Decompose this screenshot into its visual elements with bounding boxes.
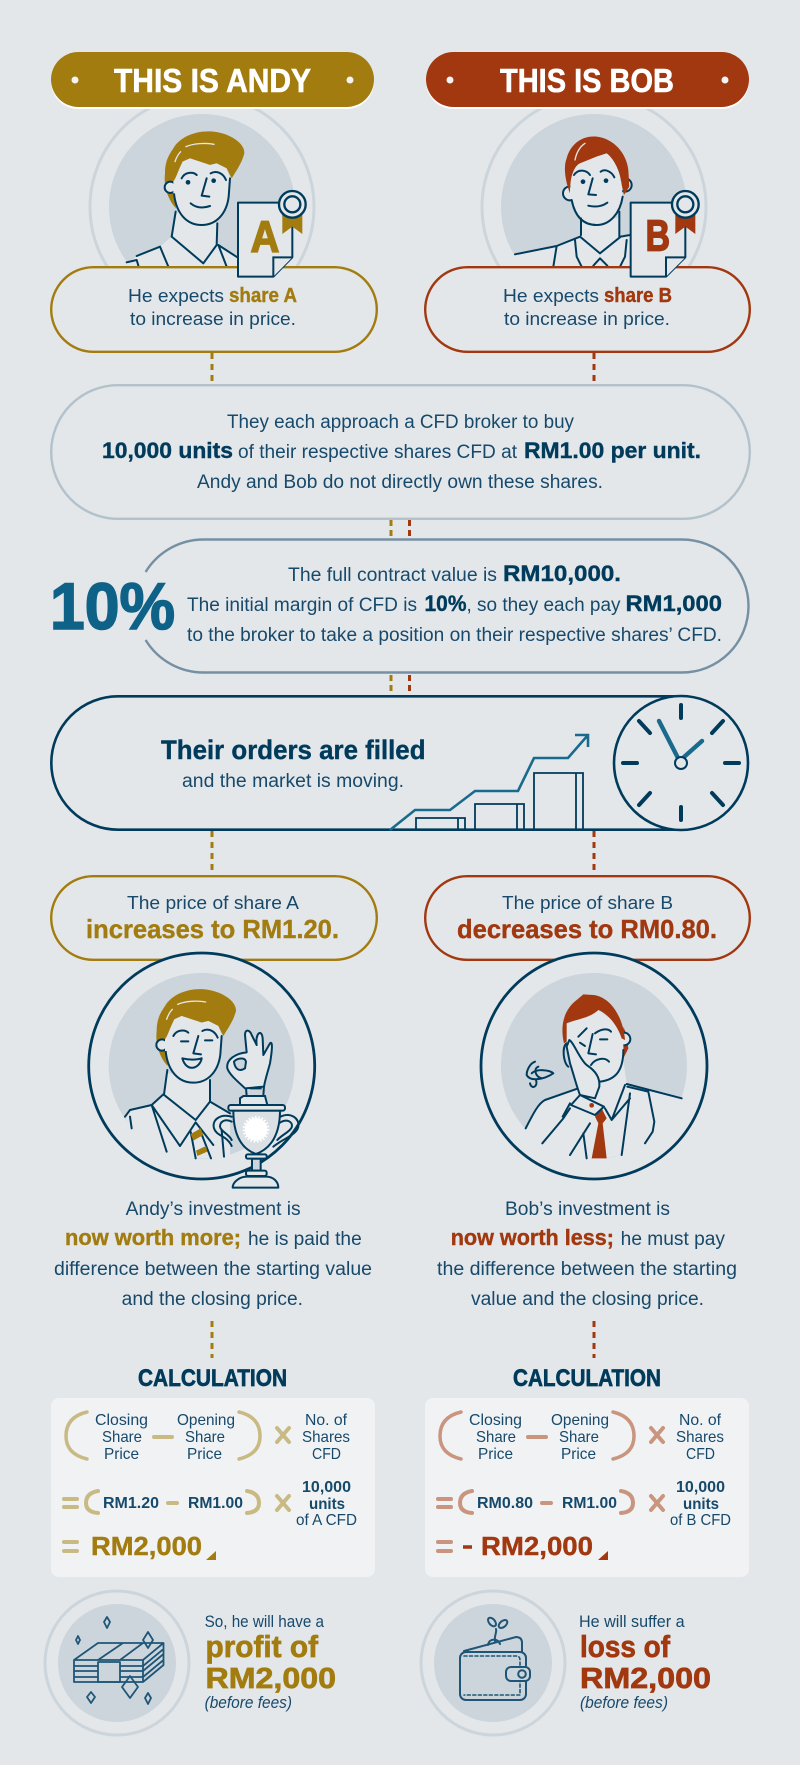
callout: share B price decreases: The price of share B (502, 892, 673, 913)
panel: Bob calculation: 10,000 (676, 1479, 725, 1496)
icon: certificate B: B (646, 212, 670, 261)
text block: Bob's investment: the difference between the starting (437, 1259, 737, 1280)
panel: Andy calculation: RM2,000 (91, 1531, 202, 1561)
panel: Andy calculation: RM1.20 (103, 1495, 159, 1512)
callout: share B price decreases: decreases to RM0.80. (457, 914, 717, 944)
text block: Andy profit: RM2,000 (206, 1663, 336, 1695)
text block: Bob's investment: now worth less; (451, 1225, 614, 1250)
text block: Bob's investment: value and the closing price. (471, 1289, 704, 1310)
text block: Bob loss: RM2,000 (580, 1663, 711, 1695)
panel: Andy calculation: of A CFD (296, 1512, 357, 1529)
panel: Bob calculation: RM0.80 (477, 1495, 533, 1512)
callout: Andy expects share A: to increase in price. (130, 308, 296, 329)
panel: orders are filled: Their orders are filled (161, 735, 426, 765)
panel: Andy calculation: CFD (312, 1446, 341, 1463)
callout: Andy expects share A: He expects (128, 285, 224, 306)
text block: Andy's investment: he is paid the (248, 1229, 362, 1250)
icon: OK hand and trophy (214, 1031, 299, 1188)
text block: Andy's investment: Andy’s investment is (126, 1199, 301, 1220)
callout: Bob expects share B: He expects (503, 285, 599, 306)
panel: Andy calculation: Opening (177, 1412, 235, 1429)
icon: certificate B (631, 191, 699, 277)
panel: Bob calculation: Share (559, 1429, 599, 1446)
panel: Andy calculation: Share (185, 1429, 225, 1446)
callout: share A price increases (51, 876, 377, 960)
text block: Bob's investment: Bob’s investment is (505, 1199, 670, 1220)
panel: approach a CFD broker: They each approach a CFD broker to buy (227, 412, 574, 433)
panel: initial margin 10%: to the broker to take a position on their respective shares’ CFD. (187, 625, 722, 646)
header pill: This is Andy: THIS IS ANDY (114, 62, 311, 99)
panel: Andy calculation: Share (102, 1429, 142, 1446)
text block: Bob loss (579, 1612, 711, 1712)
callout: share B price decreases (425, 876, 750, 960)
portrait: happy Andy with trophy (89, 953, 315, 1188)
text block: Andy profit: So, he will have a (205, 1612, 324, 1631)
panel: approach a CFD broker: of their respective shares CFD at (238, 442, 518, 463)
icon: certificate A (238, 191, 306, 277)
panel: initial margin 10%: The initial margin of CFD is (187, 595, 417, 616)
panel: Bob calculation: Closing (469, 1412, 522, 1429)
portrait: worried Bob (481, 953, 707, 1179)
panel: Bob calculation: units (683, 1496, 719, 1513)
callout: Bob expects share B (425, 267, 750, 352)
panel: Bob calculation: Share (476, 1429, 516, 1446)
big figure: 10%: 10% (50, 569, 175, 643)
text block: Andy profit: profit of (206, 1629, 319, 1664)
text block: Bob's investment: he must pay (621, 1229, 726, 1250)
callout: Bob expects share B: share B (604, 285, 672, 307)
chart: rising bars and arrow (390, 735, 588, 830)
icon: clock (614, 696, 748, 830)
panel: Andy calculation: Closing (95, 1412, 148, 1429)
header pill: This is Bob: THIS IS BOB (500, 62, 674, 99)
panel: Andy calculation: RM1.00 (188, 1495, 243, 1512)
panel: Bob calculation: RM2,000 (481, 1531, 593, 1561)
panel: Bob calculation (425, 1398, 749, 1577)
panel: approach a CFD broker: Andy and Bob do not directly own these shares. (197, 472, 603, 493)
panel: Bob calculation: CFD (686, 1446, 715, 1463)
panel: approach a CFD broker (51, 385, 750, 519)
panel: orders are filled: and the market is moving. (182, 771, 404, 792)
callout: Bob expects share B: to increase in price. (504, 308, 670, 329)
text block: Bob loss: loss of (580, 1629, 671, 1664)
panel: initial margin 10%: 10% (424, 591, 466, 616)
text block: Andy's investment (54, 1199, 372, 1310)
icon: stack of money (45, 1591, 189, 1735)
icon: certificate A: A (251, 213, 279, 262)
panel: Andy calculation (51, 1398, 375, 1577)
panel: initial margin 10%: RM10,000. (503, 561, 621, 586)
panel: initial margin 10%: , so they each pay (466, 595, 621, 616)
panel: Bob calculation: No. of (679, 1412, 722, 1429)
panel: Andy calculation: No. of (305, 1412, 348, 1429)
text block: Andy's investment: and the closing price. (122, 1289, 303, 1310)
panel: approach a CFD broker: RM1.00 per unit. (524, 438, 701, 463)
callout: Andy expects share A (51, 267, 377, 352)
panel: Bob calculation: RM1.00 (562, 1495, 617, 1512)
text block: Andy's investment: now worth more; (65, 1225, 241, 1250)
panel: Andy calculation: units (309, 1496, 345, 1513)
callout: share A price increases: increases to RM1.20. (86, 914, 339, 944)
portrait: Bob with share B certificate (482, 95, 706, 319)
panel: Bob calculation: of B CFD (670, 1512, 731, 1529)
text block: Bob loss: (before fees) (580, 1693, 668, 1712)
text block: Bob loss: He will suffer a (579, 1612, 685, 1631)
heading: calculation (Andy): CALCULATION (138, 1365, 287, 1392)
panel: approach a CFD broker: 10,000 units (102, 438, 233, 463)
icon: wallet with sprout (421, 1591, 565, 1735)
heading: calculation (Bob): CALCULATION (513, 1365, 661, 1392)
text block: Bob's investment (437, 1199, 737, 1310)
header pill: This is Andy (51, 52, 374, 109)
panel: Bob calculation: Opening (551, 1412, 609, 1429)
panel: initial margin 10%: The full contract value is (288, 565, 497, 586)
panel: Andy calculation: Price (104, 1446, 139, 1463)
panel: orders are filled (51, 696, 741, 830)
portrait: Andy with share A certificate (90, 95, 314, 319)
panel: Andy calculation: 10,000 (302, 1479, 351, 1496)
text block: Andy profit (205, 1612, 336, 1712)
callout: share A price increases: The price of share A (127, 892, 300, 913)
panel: Bob calculation: Shares (676, 1429, 724, 1446)
text block: Andy profit: (before fees) (205, 1693, 292, 1712)
callout: Andy expects share A: share A (229, 285, 297, 307)
panel: initial margin 10%: RM1,000 (626, 591, 722, 616)
panel: initial margin 10% (50, 539, 748, 673)
panel: Andy calculation: Shares (302, 1429, 350, 1446)
panel: Andy calculation: Price (187, 1446, 222, 1463)
header pill: This is Bob (426, 52, 749, 109)
panel: Bob calculation: Price (478, 1446, 513, 1463)
panel: Bob calculation: Price (561, 1446, 596, 1463)
text block: Andy's investment: difference between the starting value (54, 1259, 372, 1280)
